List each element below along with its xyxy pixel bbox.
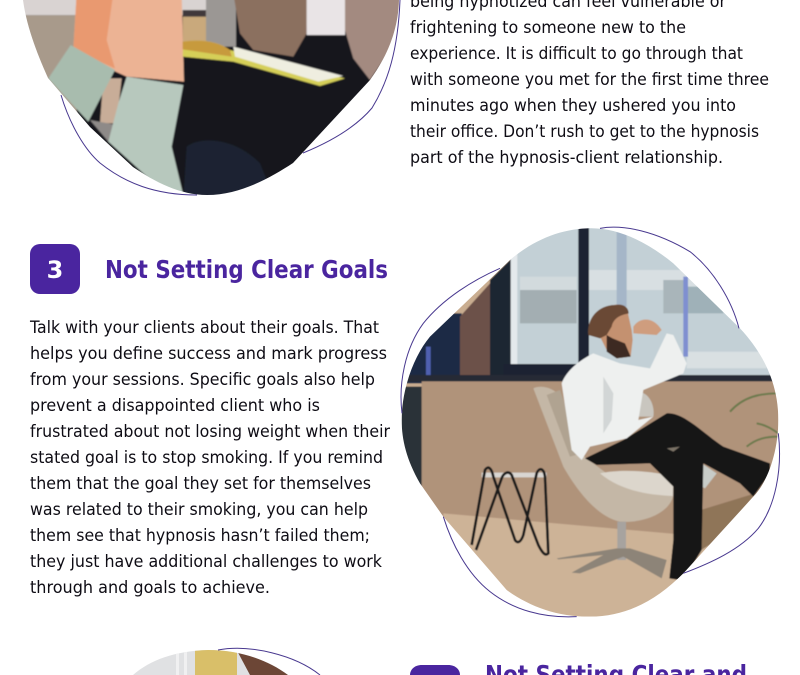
text block: top paragraph continuation: minutes ago when they ushered you into: [410, 96, 736, 116]
text block: top paragraph continuation: frightening to someone new to the: [410, 18, 686, 38]
plant: [730, 393, 778, 447]
text block: section 3 paragraph: helps you define success and mark progress: [30, 344, 387, 364]
man torso: [562, 333, 687, 460]
chair: [533, 387, 673, 522]
number badge 3: 3: [47, 256, 63, 284]
text block: top paragraph continuation: with someone you met for the first time three: [410, 70, 769, 90]
text block: top paragraph continuation: part of the hypnosis-client relationship.: [410, 148, 723, 168]
text block: section 3 paragraph: Talk with your clients about their goals. That: [29, 318, 379, 338]
man head: [600, 304, 634, 357]
outline: lower right arc of blob 2: [683, 433, 780, 573]
number badge 4, cropped at page bottom: [410, 665, 460, 675]
photo: man seated in armchair by window, blob 2: [390, 220, 790, 620]
text block: section 3 paragraph: from your sessions. Specific goals also help: [30, 370, 375, 390]
outline: lower left arc of blob 1: [61, 95, 197, 195]
text block: top paragraph continuation: [410, 0, 769, 168]
photo: top of blob 3: [133, 648, 320, 675]
outline: top right arc of blob 2: [600, 227, 739, 328]
text block: section 3 paragraph: through and goals to achieve.: [30, 578, 270, 598]
text block: section 3 paragraph: [29, 318, 390, 598]
outline: upper left arc of blob 2: [401, 268, 500, 413]
heading: Not Setting Clear Goals: Not Setting Clear Goals: [105, 255, 388, 284]
man raised hand: [633, 320, 662, 335]
text block: section 3 paragraph: stated goal is to stop smoking. If you remind: [30, 448, 383, 468]
text block: section 3 paragraph: was related to their smoking, you can help: [30, 500, 368, 520]
text block: section 3 paragraph: prevent a disappointed client who is: [30, 396, 320, 416]
man legs: [585, 413, 770, 580]
text block: section 3 paragraph: them that the goal they set for themselves: [30, 474, 371, 494]
outline: lower left arc of blob 2: [443, 517, 577, 617]
number badge 3: [30, 244, 80, 294]
stool: [472, 468, 548, 554]
outline: top arc of blob 3: [218, 648, 320, 675]
text block: top paragraph continuation: their office. Don’t rush to get to the hypnosis: [410, 122, 759, 142]
text block: section 3 paragraph: they just have additional challenges to work: [30, 552, 382, 572]
outline: right arc of blob 1: [303, 0, 400, 153]
text block: section 3 paragraph: them see that hypnosis hasn’t failed them;: [30, 526, 370, 546]
text block: top paragraph continuation: experience. It is difficult to go through that: [410, 44, 743, 64]
photo: person's hands with notebook, blob 1: [20, 0, 403, 207]
text block: section 3 paragraph: frustrated about not losing weight when their: [30, 422, 390, 442]
